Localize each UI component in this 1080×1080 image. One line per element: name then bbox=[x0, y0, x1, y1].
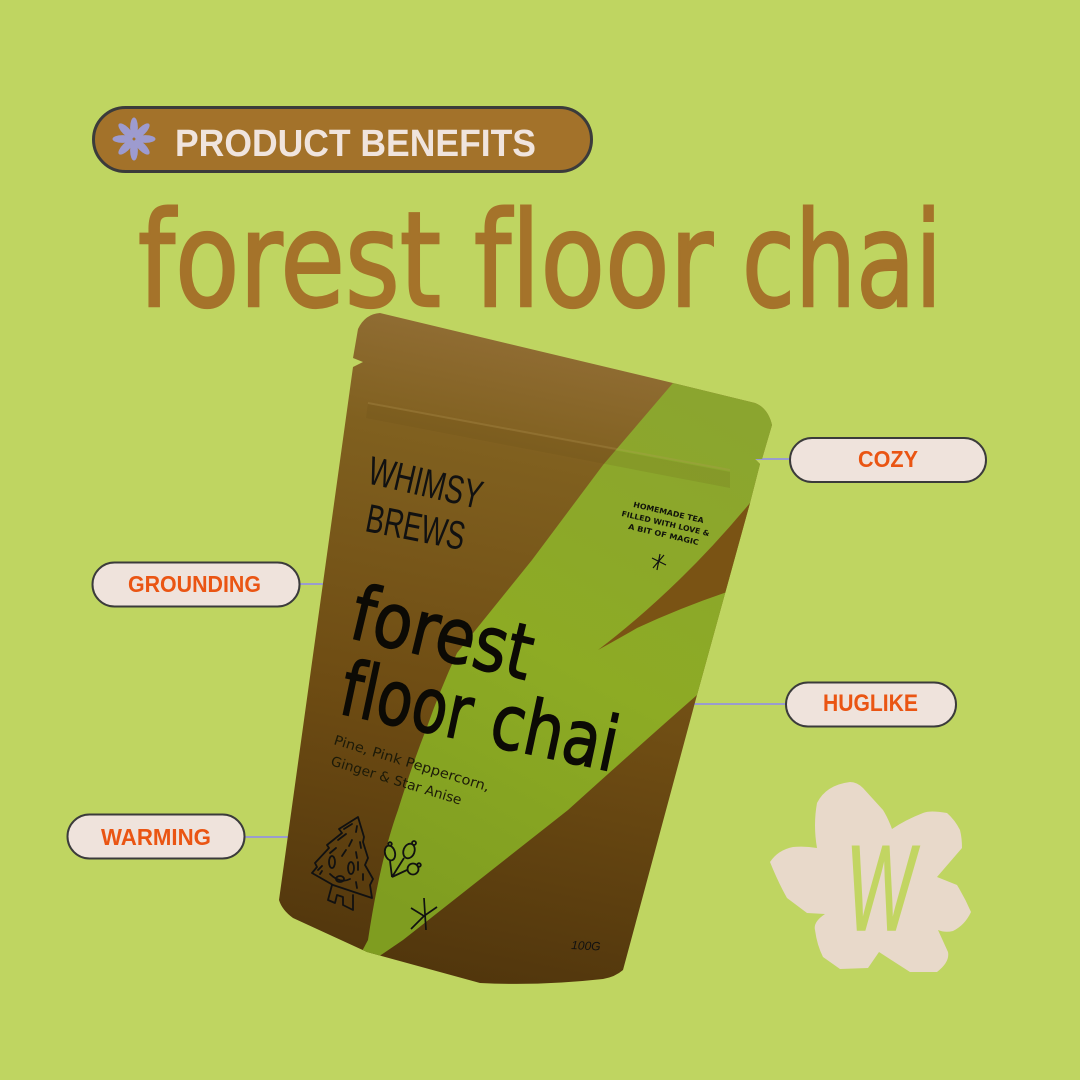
pouch weight: 100G bbox=[571, 938, 601, 954]
pouch product name: forest bbox=[343, 568, 542, 697]
label: warming bbox=[68, 814, 244, 858]
icon: lilac flower bbox=[112, 118, 156, 160]
header pill: product benefits bbox=[94, 108, 592, 172]
title: forest bbox=[138, 184, 441, 338]
pouch product name: floor bbox=[333, 644, 481, 758]
header text: PRODUCT BENEFITS bbox=[175, 123, 536, 165]
label: cozy bbox=[790, 438, 986, 482]
pouch product name bbox=[333, 568, 627, 789]
pouch flavour notes: Pine, Pink Peppercorn, bbox=[332, 733, 491, 795]
tea pouch bbox=[270, 305, 790, 995]
pouch brand logo bbox=[362, 449, 487, 559]
label: cozy: COZY bbox=[858, 446, 918, 472]
label: huglike bbox=[786, 682, 956, 726]
brown leaf shard bbox=[598, 503, 750, 650]
pouch tagline: A BIT OF MAGIC bbox=[627, 522, 700, 547]
pouch brand logo: WHIMSY bbox=[364, 449, 487, 518]
pouch tagline bbox=[621, 500, 711, 547]
pouch product name: chai bbox=[483, 676, 627, 789]
label: grounding bbox=[92, 562, 300, 606]
connector lines bbox=[245, 459, 789, 837]
icon: peppercorn sprig bbox=[383, 841, 421, 877]
zipper seal bbox=[604, 450, 730, 488]
pouch tagline: HOMEMADE TEA bbox=[632, 500, 705, 525]
label: grounding: GROUNDING bbox=[128, 571, 261, 597]
label: huglike: HUGLIKE bbox=[823, 690, 918, 717]
label: warming: WARMING bbox=[101, 824, 211, 850]
pouch body bbox=[270, 305, 790, 995]
brand badge: flower bbox=[770, 782, 971, 972]
green diagonal band bbox=[360, 383, 790, 957]
icon: large star bbox=[411, 898, 437, 930]
brand badge: W monogram: W bbox=[846, 820, 920, 956]
title: chai bbox=[742, 184, 942, 338]
pouch flavour notes: Ginger & Star Anise bbox=[329, 754, 464, 809]
title bbox=[138, 184, 942, 338]
icon: small star bbox=[652, 554, 666, 570]
title: floor bbox=[474, 184, 714, 338]
icon: tree character bbox=[312, 817, 373, 910]
pouch brand logo: BREWS bbox=[362, 497, 469, 559]
pouch tagline: FILLED WITH LOVE & bbox=[621, 509, 711, 538]
